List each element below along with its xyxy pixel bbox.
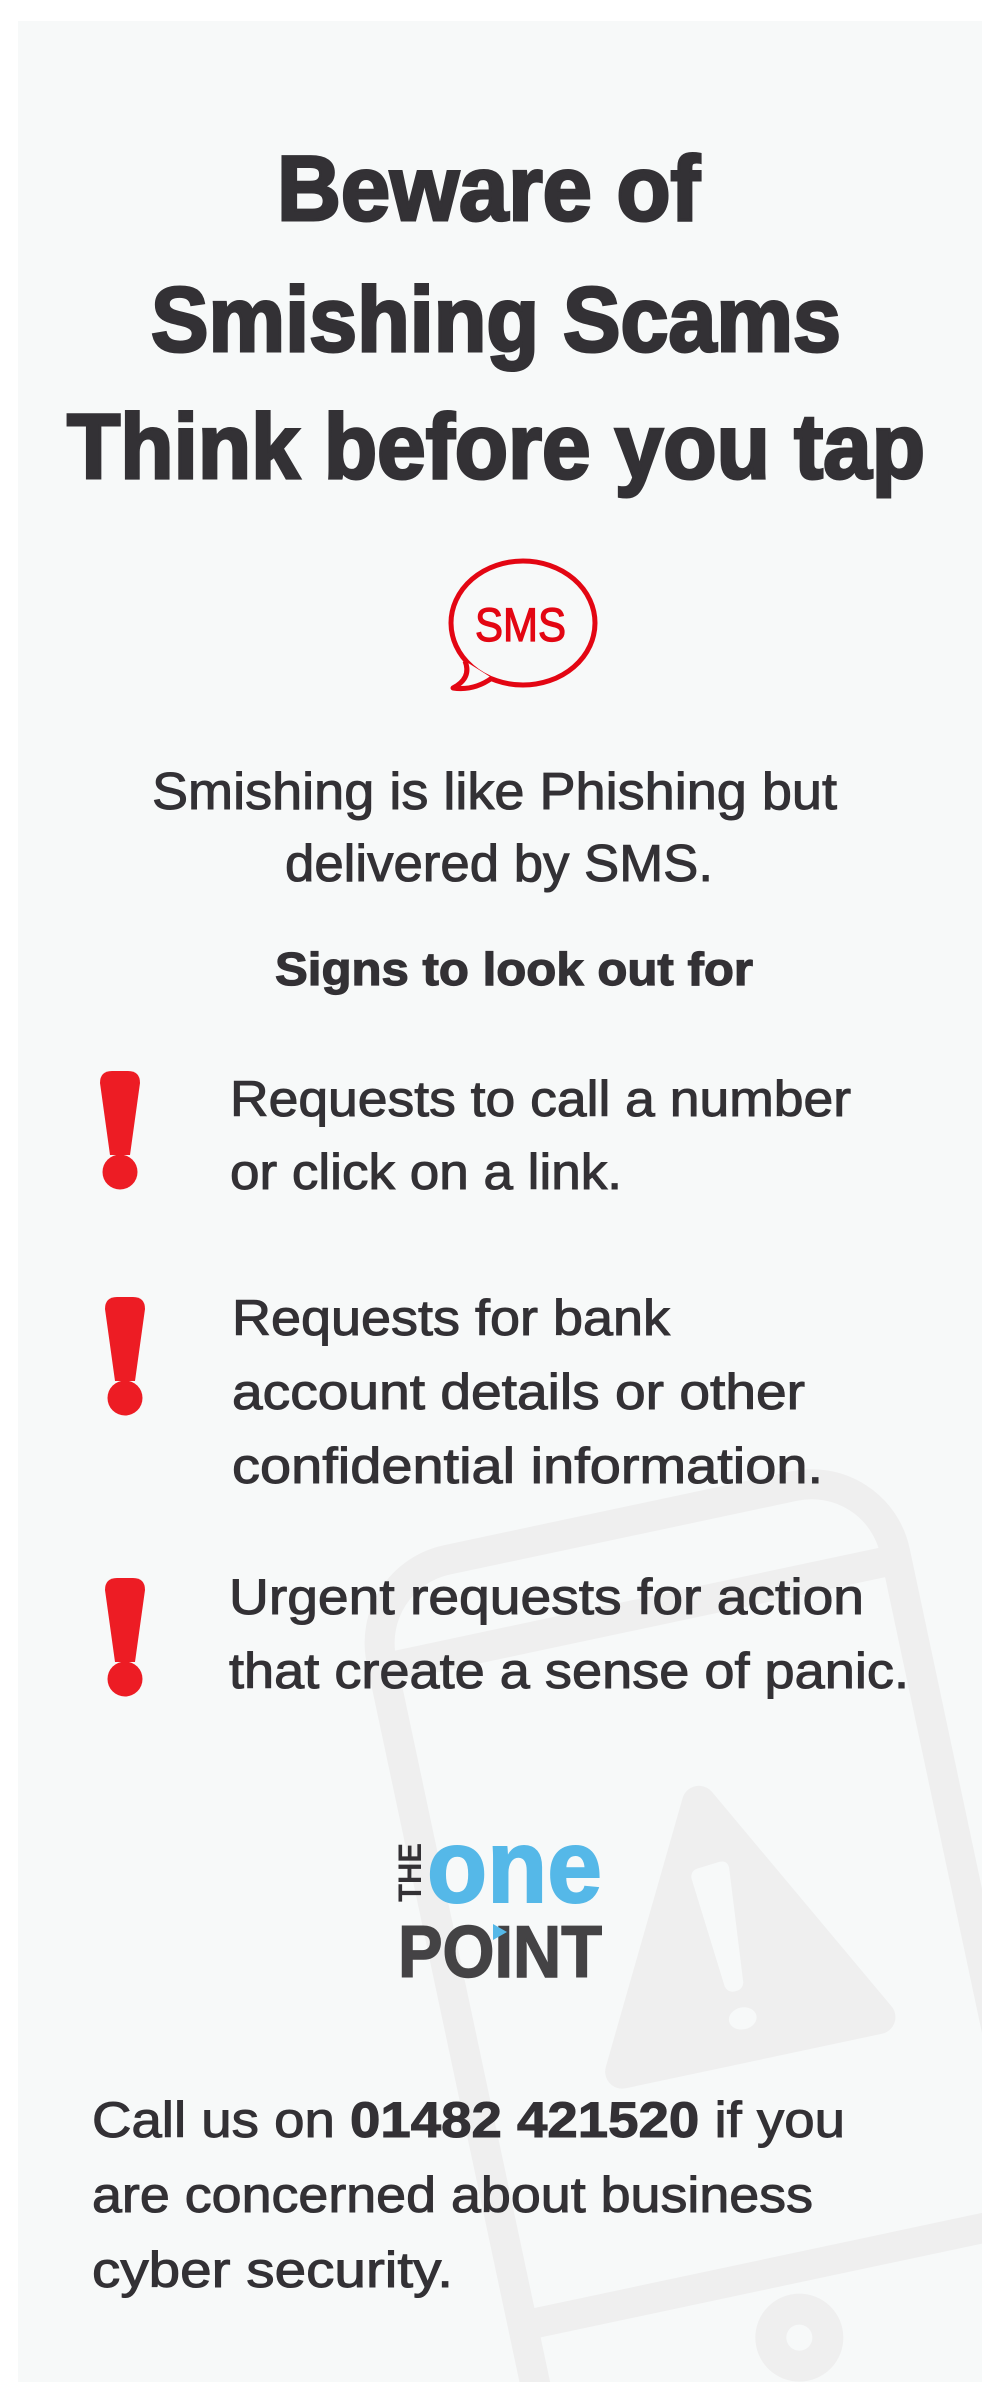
logo: The One Point: THE <box>392 1843 428 1902</box>
decorative phone outline with warning <box>364 1468 1000 2400</box>
text: sign 2: Requests for bank <box>232 1290 671 1346</box>
text block: intro: Smishing is like Phishing but <box>152 763 838 821</box>
logo: The One Point: one <box>427 1809 602 1925</box>
text: sign 2 <box>232 1290 823 1494</box>
text block: intro: delivered by SMS. <box>285 835 713 893</box>
text: sign 2: confidential information. <box>232 1438 823 1494</box>
text: sign 1: Requests to call a number <box>230 1071 851 1127</box>
text: sign 3 <box>229 1569 909 1699</box>
sign 2 <box>105 1290 823 1494</box>
title: Smishing Scams <box>151 269 841 371</box>
text: sign 3: that create a sense of panic. <box>229 1643 909 1699</box>
text block: call to action <box>92 2092 845 2298</box>
title: Think before you tap <box>67 396 925 498</box>
icon: exclamation 2 <box>105 1297 145 1416</box>
text: sign 3: Urgent requests for action <box>229 1569 864 1625</box>
icon: exclamation 3 <box>105 1578 145 1696</box>
heading: signs to look out for: Signs to look out for <box>275 943 753 995</box>
text: sign 1 <box>230 1071 851 1200</box>
text: sign 1: or click on a link. <box>230 1144 622 1200</box>
text block: call to action: Call us on 01482 421520 if you <box>92 2092 845 2148</box>
icon: SMS speech bubble: SMS <box>475 598 566 651</box>
logo: The One Point <box>392 1809 602 1993</box>
sign 3 <box>105 1569 909 1699</box>
icon: SMS speech bubble <box>451 561 595 689</box>
logo: The One Point: POINT <box>398 1912 602 1993</box>
title: Beware of <box>277 138 700 240</box>
sign 1 <box>100 1071 851 1200</box>
text block: intro <box>152 763 838 893</box>
icon: exclamation 1 <box>100 1071 140 1190</box>
text: sign 2: account details or other <box>232 1364 805 1420</box>
text block: call to action: are concerned about business <box>92 2167 813 2223</box>
title <box>67 138 925 498</box>
text block: call to action: cyber security. <box>92 2242 453 2298</box>
